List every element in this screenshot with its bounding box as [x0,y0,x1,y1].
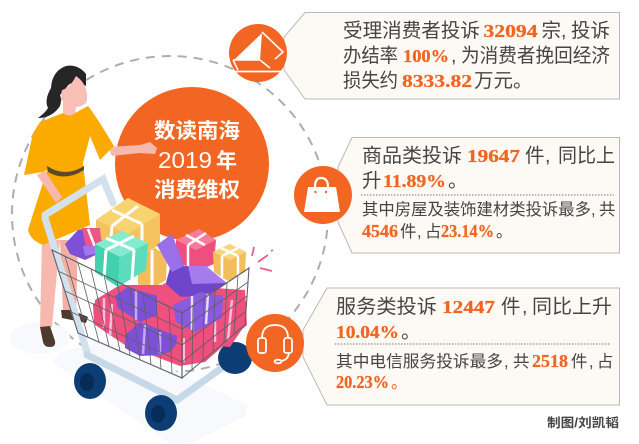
text block: 件 [571,353,587,371]
text block: 为消费者挽回经济 [461,45,610,67]
text block: 万元。 [474,70,533,92]
text block: 2518 [532,351,568,371]
purple gift middle in basket [115,287,157,322]
text block: 受理消费者投诉 [343,20,480,42]
purple gift lower [125,322,177,356]
icon: shopping bag [294,166,352,224]
text block: 服务类投诉 [336,296,437,318]
text block: 其中房屋及装饰建材类投诉最多 [362,201,591,219]
text block: 件 [525,145,545,167]
panel box [284,12,620,99]
text block: , [417,223,422,241]
panel box [338,138,620,253]
right arm [108,142,157,156]
gift pile [65,198,247,366]
panel: goods complaints [338,138,620,253]
belt [47,166,84,177]
green gift [95,231,148,287]
purple gift right in basket [173,292,223,332]
front leg and shoe [40,240,60,347]
text block: 办结率 [343,45,398,67]
cart wheels [74,342,252,431]
pink gift centre in basket [147,283,184,322]
text block: , [522,296,527,318]
head and neck [61,76,87,116]
text block: 19647 [467,146,520,166]
text block: 共 [513,353,529,371]
pink gift lower right [170,335,203,364]
back leg and shoe [60,240,88,323]
centre circle heading: 数读南海 [154,120,240,143]
centre circle heading: 消费维权 [154,179,240,202]
sparkle marks [252,247,273,271]
text block [335,296,613,392]
text block: 件 [400,223,416,241]
yellow gift top [96,198,160,262]
text block: 20.23% [336,372,389,392]
text block: , [591,201,596,219]
left arm [37,171,62,203]
text block: 12447 [442,297,495,317]
text block: 件 [501,296,521,318]
icon: headset [246,314,304,372]
credit line: 制图/刘凯韬 [547,415,619,430]
text block: , [545,145,550,167]
text block: 11.89% [383,171,446,191]
purple gift left [65,228,102,260]
text block [343,20,610,92]
text block: 。 [401,321,421,343]
centre circle heading: 年 [216,150,237,173]
text block: , [561,20,566,42]
yellow dress [24,106,114,245]
pink gift left in basket [93,293,130,340]
wire basket [52,250,249,378]
text block: 23.14% [441,221,494,241]
text block: 4546 [362,221,398,241]
text block: 同比上升 [532,296,612,318]
panel box [303,288,620,405]
text block: 占 [597,353,613,371]
pink gift right in basket [200,290,247,347]
text block: 宗 [542,20,561,42]
text block: , [589,353,594,371]
text block: 商品类投诉 [362,145,462,167]
yellow gift middle [138,248,167,290]
floor shadows [10,322,247,444]
text block [361,145,615,241]
yellow gift right [213,244,246,281]
text block: 8333.82 [402,71,472,91]
centre circle heading: 2019 [158,147,212,173]
text block: 其中电信服务投诉最多 [336,353,503,371]
shopping cart frame [45,179,233,400]
text block: 升 [362,170,382,192]
text block: 10.04% [336,322,399,342]
icon: envelope [229,24,287,82]
text block: , [504,353,509,371]
woman figure [24,66,157,347]
ponytail and hair [38,66,86,118]
text block: 。 [391,374,407,392]
purple gift large [157,234,227,297]
text block: 。 [496,223,512,241]
text block: 同比上 [558,145,615,167]
text block: 共 [599,201,615,219]
text block: 投诉 [571,20,610,42]
text block: 100% [403,46,449,66]
text block: 。 [448,170,468,192]
panel: total complaints [284,12,620,99]
text block: 占 [425,223,441,241]
centre circle heading [115,87,269,241]
text block: 32094 [484,21,538,41]
text block: , [451,45,456,67]
pink gift upper [176,229,216,272]
basket gift backing [95,285,247,366]
text block: 损失约 [343,70,398,92]
panel: service complaints [303,288,620,405]
